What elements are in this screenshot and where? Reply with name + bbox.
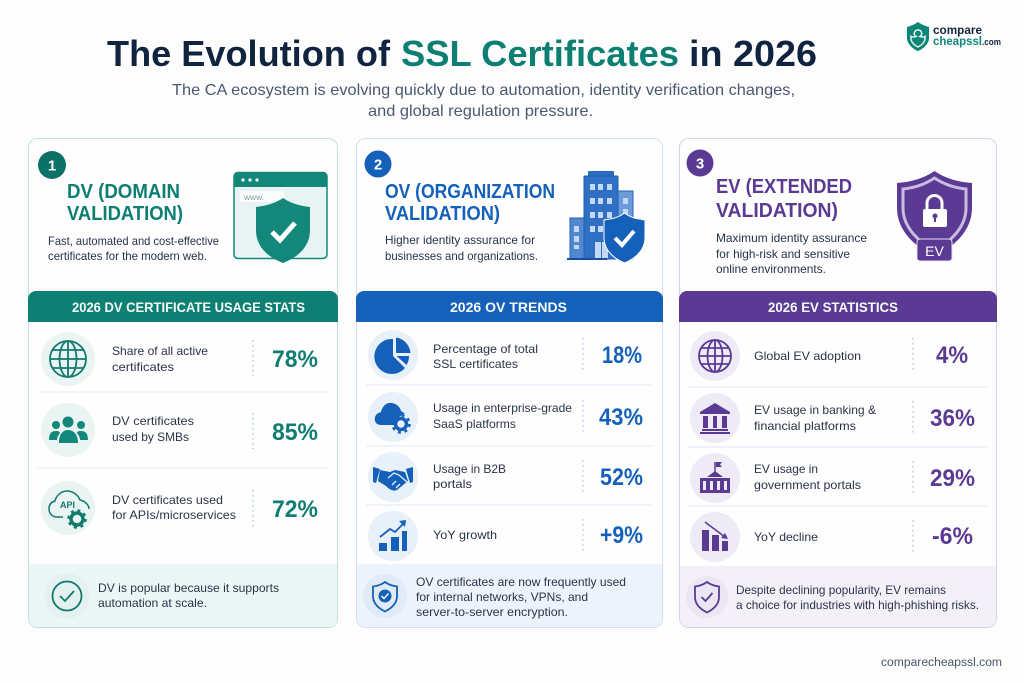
DV section header band: 2026 DV CERTIFICATE USAGE STATS [72,299,305,315]
OV stat: YoY growth: +9% [600,522,643,549]
OV heading [385,181,555,225]
DV description: certificates for the modern web. [48,249,207,263]
panel: EV [679,138,997,628]
DV heading [67,181,183,225]
DV heading: VALIDATION) [67,203,183,225]
DV stat: SMBs: used by SMBs [112,430,189,444]
OV stat: B2B portals [368,452,643,502]
EV description [716,231,867,276]
OV stat: enterprise SaaS: SaaS platforms [433,417,516,431]
logo: comparecheapssl: cheapssl [933,34,982,48]
OV stat: enterprise SaaS: Usage in enterprise-grade [433,401,572,415]
OV description [385,233,538,263]
subtitle [172,82,795,120]
DV stat: APIs: for APIs/microservices [112,508,236,522]
DV number badge: 1 [48,158,56,174]
DV description [48,234,219,263]
OV heading: OV (ORGANIZATION [385,181,555,203]
DV stat: SMBs [41,403,318,457]
EV description: Maximum identity assurance [716,231,867,245]
icon: browser with shield [234,172,327,263]
icon: EV shield with padlock [897,171,972,261]
OV section header band: 2026 OV TRENDS [450,299,567,315]
icon: office buildings with shield [567,171,645,263]
OV stat: share of SSL certificates: Percentage of total [433,342,538,356]
logo: comparecheapssl: compare [933,23,982,37]
EV stat: YoY decline: -6% [932,523,973,550]
EV section header band: 2026 EV STATISTICS [768,299,898,315]
DV number badge [38,151,66,179]
OV description: businesses and organizations. [385,249,538,263]
EV stat: government portals: government portals [754,478,861,492]
DV stat: share of active certificates [41,332,318,386]
title: The Evolution of [107,33,391,74]
DV stat: APIs: 72% [272,496,318,523]
EV stat: government portals [690,453,975,503]
EV stat: banking platforms: EV usage in banking & [754,403,876,417]
OV number badge [364,150,392,178]
DV section header band [28,291,338,322]
EV section header band [679,291,997,322]
EV stat: banking platforms: 36% [930,405,975,432]
EV stat: banking platforms: financial platforms [754,419,856,433]
DV stat: share of active certificates: 78% [272,346,318,373]
OV stat: share of SSL certificates [368,330,642,380]
OV stat: enterprise SaaS [368,392,643,442]
EV callout: a choice for industries with high-phishing risks. [736,598,979,612]
icon: browser with shield: www. [243,192,264,202]
DV callout [29,564,337,627]
title: SSL Certificates [401,33,679,74]
EV stat: YoY decline: YoY decline [754,530,818,544]
OV callout: OV certificates are now frequently used [416,575,626,589]
OV stat: share of SSL certificates: 18% [602,342,642,369]
DV stat: APIs [41,481,318,535]
logo: comparecheapssl: .com [982,37,1001,47]
EV stat: global adoption: Global EV adoption [754,349,861,363]
EV stat: global adoption: 4% [936,342,968,369]
EV description: online environments. [716,262,826,276]
DV description: Fast, automated and cost-effective [48,234,219,248]
EV stat: government portals: 29% [930,465,975,492]
DV stat: APIs: DV certificates used [112,493,223,507]
OV number badge: 2 [374,156,382,174]
DV stat: share of active certificates: certificates [112,360,174,374]
OV stat: B2B portals: Usage in B2B [433,462,506,476]
OV description: Higher identity assurance for [385,233,535,247]
panel: DV [28,138,338,628]
OV callout: for internal networks, VPNs, and [416,590,588,604]
EV heading: VALIDATION) [716,200,838,222]
DV stat: SMBs: DV certificates [112,414,194,428]
OV callout: server-to-server encryption. [416,605,568,619]
logo: comparecheapssl [907,22,1001,51]
EV callout [680,566,996,627]
EV stat: banking platforms [690,393,975,443]
EV number badge: 3 [696,156,704,172]
OV stat: share of SSL certificates: SSL certificates [433,357,518,371]
EV stat: government portals: EV usage in [754,462,818,476]
icon: EV shield with padlock: EV [925,243,944,259]
EV description: for high-risk and sensitive [716,247,850,261]
EV callout: Despite declining popularity, EV remains [736,583,946,597]
DV heading: DV (DOMAIN [67,181,180,203]
EV number badge [686,150,714,176]
OV stat: enterprise SaaS: 43% [599,404,643,431]
subtitle: and global regulation pressure. [368,103,593,120]
EV heading [716,176,852,222]
footer url: comparecheapssl.com [881,657,1002,669]
OV callout [357,564,662,627]
DV callout: automation at scale. [98,596,207,610]
OV heading: VALIDATION) [385,203,500,225]
title: in 2026 [689,33,817,74]
DV stat: SMBs: 85% [272,419,318,446]
EV heading: EV (EXTENDED [716,176,852,198]
OV stat: YoY growth [368,511,643,561]
DV stat: APIs: API [60,500,75,510]
EV stat: global adoption [690,331,968,381]
DV callout: DV is popular because it supports [98,581,279,595]
DV stat: share of active certificates: Share of all active [112,344,208,358]
EV stat: YoY decline [690,512,973,562]
panel: OV [356,138,663,628]
subtitle: The CA ecosystem is evolving quickly due to automation, identity verification changes, [172,82,795,99]
title [107,33,817,74]
OV section header band [356,291,663,322]
OV stat: B2B portals: portals [433,477,472,491]
OV stat: YoY growth: YoY growth [433,528,497,542]
OV stat: B2B portals: 52% [600,464,643,491]
